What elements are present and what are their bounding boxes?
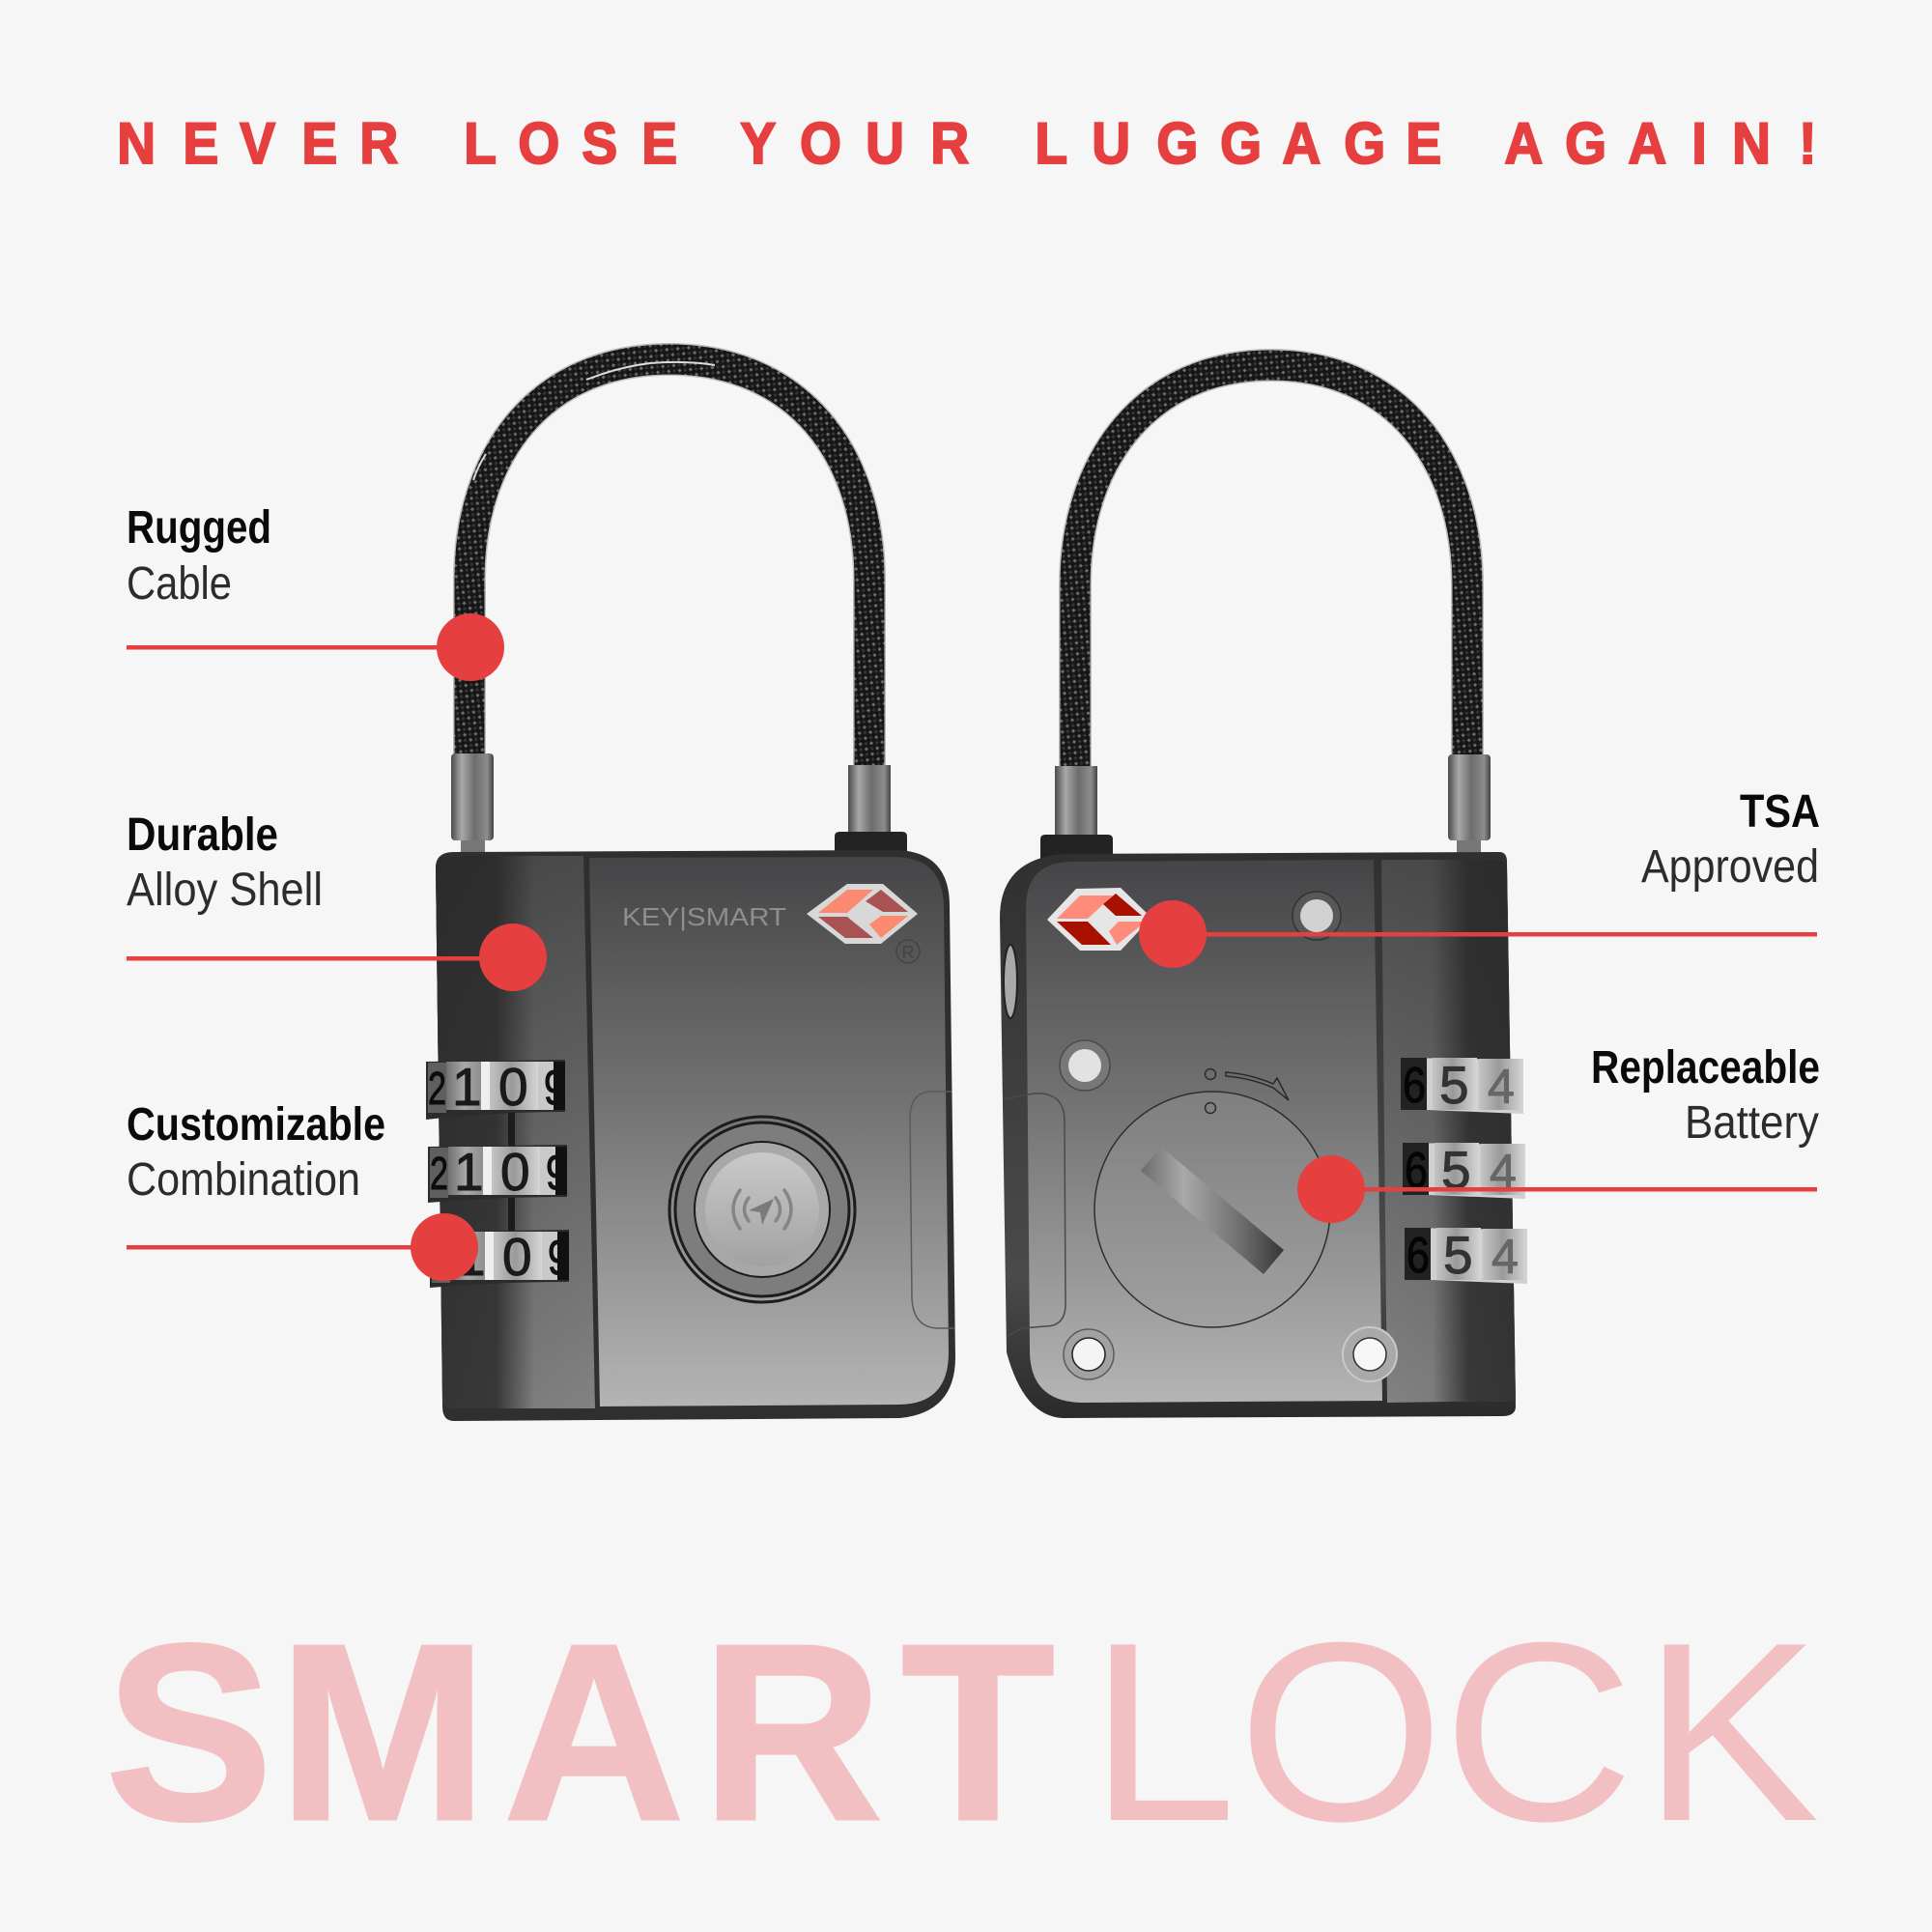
combination dial: row 3: 0 — [502, 1227, 532, 1287]
leader line — [127, 1245, 444, 1250]
shell end section — [436, 856, 595, 1408]
leader line — [127, 645, 470, 649]
combination dial: row 2: 1 — [454, 1142, 484, 1202]
cable — [1075, 365, 1467, 773]
marker dot — [1297, 1155, 1365, 1223]
icon: TSA diamond — [807, 884, 918, 944]
combination dial: row 2 — [1403, 1140, 1525, 1200]
combination dial: row 1: 6 — [1403, 1058, 1426, 1114]
registered mark — [896, 940, 920, 963]
combination dial: row 1: 9 — [544, 1061, 565, 1115]
leader line — [127, 956, 513, 960]
combination dial: row 3 — [430, 1227, 569, 1288]
combination dial: row 1: 5 — [1439, 1055, 1469, 1115]
battery cover — [1094, 1092, 1330, 1327]
combination dial: row 1: 0 — [498, 1057, 528, 1117]
cable — [469, 359, 869, 773]
end section — [1381, 860, 1516, 1403]
combination dial: row 1 — [426, 1057, 565, 1120]
lock body — [436, 850, 955, 1421]
LOCK: LOCK — [1089, 1590, 1820, 1875]
side button — [1004, 945, 1017, 1018]
marker dot — [479, 923, 547, 991]
cable ferrules — [451, 753, 907, 854]
dial axle — [508, 1111, 515, 1241]
combination dial: row 3: 1 — [456, 1227, 486, 1287]
SMART: SMART — [105, 1593, 1055, 1873]
callout subheading: Combination — [127, 1154, 360, 1206]
combination dial: row 2 — [428, 1142, 567, 1203]
combination dial: row 3: 4 — [1492, 1230, 1519, 1284]
battery slot — [1141, 1147, 1284, 1274]
leader line — [1173, 932, 1817, 937]
icon: TSA diamond — [1047, 888, 1151, 951]
side panel outline — [1004, 1094, 1065, 1336]
callout heading: Durable — [127, 810, 278, 861]
screw holes — [1060, 892, 1397, 1381]
brand wordmark: KEY|SMART — [622, 902, 786, 931]
back face — [1026, 860, 1382, 1403]
callout subheading: Alloy Shell — [127, 865, 323, 916]
front face — [589, 857, 949, 1406]
combination dial: row 2: 5 — [1441, 1140, 1471, 1200]
callout heading: TSA — [1740, 786, 1820, 838]
combination dial: row 1: 2 — [428, 1064, 446, 1115]
callout: durable alloy shell — [127, 810, 547, 991]
combination dial: row 1: 1 — [452, 1057, 482, 1117]
marker dot — [411, 1213, 478, 1281]
open / close markers — [1206, 1068, 1289, 1113]
callout: customizable combination — [127, 1099, 478, 1281]
combination dial: row 3: 5 — [1443, 1225, 1473, 1285]
callout subheading: Cable — [127, 558, 232, 610]
combination dial: row 3: 6 — [1406, 1228, 1430, 1284]
leader line — [1331, 1187, 1817, 1192]
callout heading: Rugged — [127, 502, 271, 554]
end section shading — [1381, 860, 1516, 1403]
marker dot — [1139, 900, 1207, 968]
cable ferrules — [1040, 754, 1491, 862]
combination dial: row 1 — [1401, 1055, 1523, 1115]
callout heading: Customizable — [127, 1099, 385, 1151]
registered mark: R — [902, 943, 914, 962]
combination dial: row 2: 2 — [430, 1149, 448, 1200]
callout: TSA approved — [1139, 786, 1820, 968]
combination dial: row 2: 6 — [1405, 1143, 1428, 1199]
side panel outline — [910, 1092, 954, 1328]
product name wordmark — [105, 1590, 1820, 1875]
title: NEVER LOSE YOUR LUGGAGE AGAIN! — [117, 112, 1816, 177]
callout heading: Replaceable — [1591, 1042, 1820, 1094]
locator button — [669, 1117, 855, 1302]
combination dial: row 2: 4 — [1490, 1145, 1517, 1199]
combination dial: row 2: 9 — [546, 1146, 567, 1200]
left lock: key side — [426, 359, 955, 1421]
right lock: back side — [1000, 365, 1527, 1418]
callout: rugged cable — [127, 502, 504, 681]
end section shading — [436, 856, 595, 1408]
combination dial: row 1: 4 — [1488, 1060, 1515, 1114]
callout: replaceable battery — [1297, 1042, 1820, 1223]
callout subheading: Approved — [1641, 841, 1819, 893]
combination dial: row 2: 0 — [500, 1142, 530, 1202]
combination dial: row 3: 9 — [548, 1231, 569, 1285]
marker dot — [437, 613, 504, 681]
callout subheading: Battery — [1685, 1097, 1819, 1149]
combination dial: row 3 — [1405, 1225, 1527, 1285]
lock body — [1000, 852, 1516, 1418]
